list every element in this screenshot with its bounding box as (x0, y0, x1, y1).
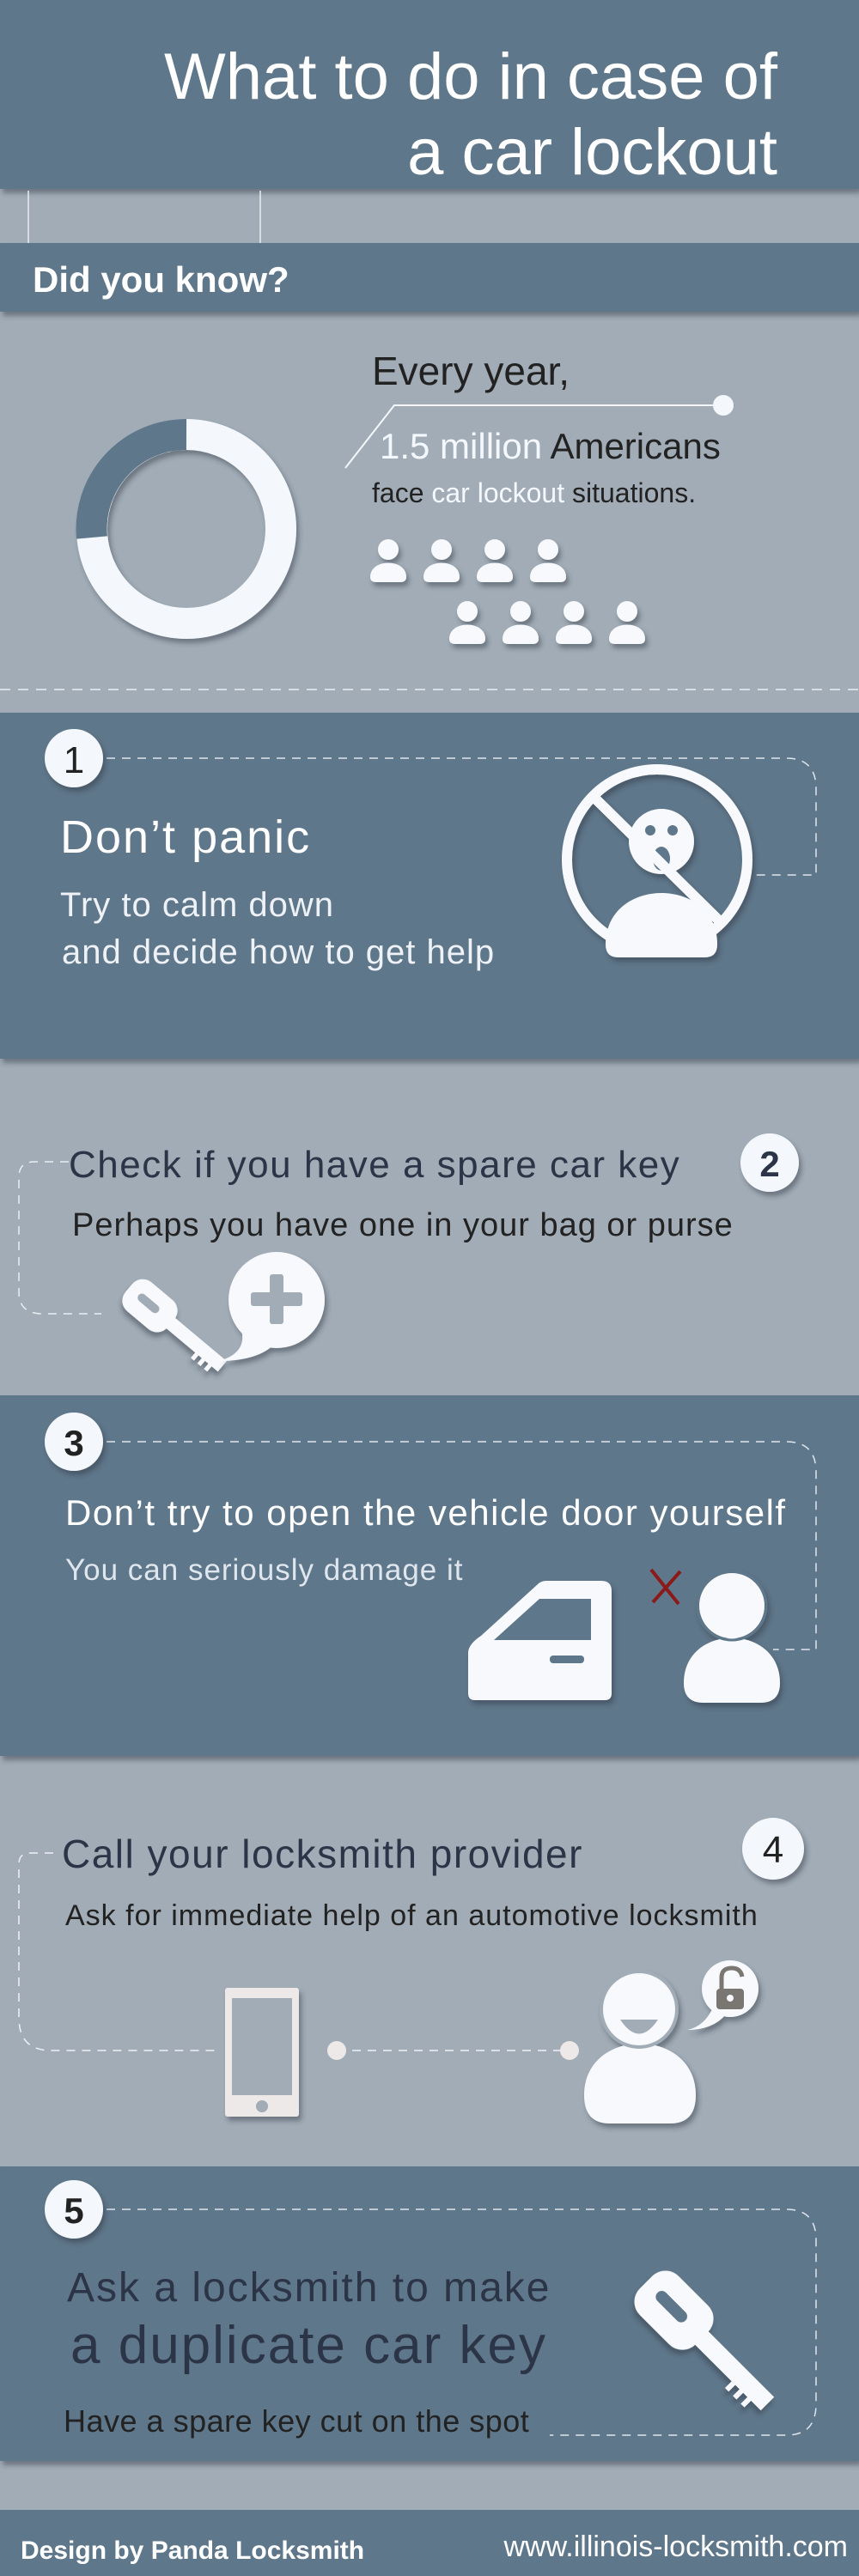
panel: step 1 (0, 713, 859, 1059)
badge 3 (45, 1413, 103, 1471)
stat text: 1.5 million Americans (380, 426, 721, 466)
stat text: Every year, (372, 349, 570, 393)
heading step 4: Call your locksmith provider (62, 1832, 583, 1876)
stat text: face car lockout situations. (372, 477, 696, 508)
text step 4: Ask for immediate help of an automotive locksmith (65, 1899, 758, 1932)
badge 3: 3 (64, 1423, 84, 1463)
badge 5 (45, 2180, 103, 2239)
icon: plus speech bubble (219, 1252, 325, 1361)
heading step 1: Don’t panic (60, 811, 311, 863)
icon: no panic (567, 769, 747, 957)
stat text (372, 349, 721, 508)
badge 2 (740, 1133, 799, 1192)
badge 5: 5 (64, 2190, 84, 2231)
title line 2: a car lockout (407, 116, 777, 189)
footer: Design by Panda Locksmith (21, 2537, 364, 2565)
text step 1 (60, 886, 495, 971)
did you know band: Did you know? (33, 259, 289, 300)
connector dots (327, 2041, 579, 2060)
icon: key (117, 1273, 235, 1381)
text step 1: and decide how to get help (62, 933, 495, 971)
icon: smiling locksmith (584, 1971, 696, 2123)
icon: person (684, 1571, 780, 1703)
badge 1: 1 (64, 739, 84, 781)
title: What to do in case of (164, 40, 778, 113)
panel: step 2 (19, 1133, 799, 1381)
badge 4 (742, 1818, 804, 1880)
footer: www.illinois-locksmith.com (503, 2530, 848, 2563)
icon: red x (651, 1570, 680, 1604)
heading step 5: a duplicate car key (70, 2316, 547, 2375)
badge 4: 4 (763, 1829, 783, 1871)
callout line (345, 395, 768, 479)
heading step 5 (67, 2265, 551, 2375)
badge 1 (45, 729, 103, 787)
text step 2: Perhaps you have one in your bag or purse (72, 1207, 734, 1243)
footer (0, 2510, 859, 2576)
panel: step 5 (0, 2166, 859, 2461)
icon: key large (626, 2263, 787, 2423)
panel: step 4 (19, 1818, 804, 2123)
text step 5: Have a spare key cut on the spot (64, 2403, 529, 2439)
text step 1: Try to calm down (60, 886, 334, 924)
people icons (370, 539, 645, 644)
donut chart (92, 434, 281, 623)
panel: step 3 (0, 1395, 859, 1756)
heading step 3: Don’t try to open the vehicle door yourself (65, 1492, 787, 1533)
heading step 2: Check if you have a spare car key (69, 1144, 680, 1186)
heading step 5: Ask a locksmith to make (67, 2265, 551, 2311)
icon: car door (468, 1581, 612, 1700)
badge 2: 2 (759, 1144, 780, 1184)
text step 3: You can seriously damage it (65, 1553, 463, 1587)
icon: phone (225, 1988, 299, 2117)
header band (0, 0, 859, 189)
icon: lock bubble (687, 1960, 758, 2030)
did you know band (0, 243, 859, 312)
